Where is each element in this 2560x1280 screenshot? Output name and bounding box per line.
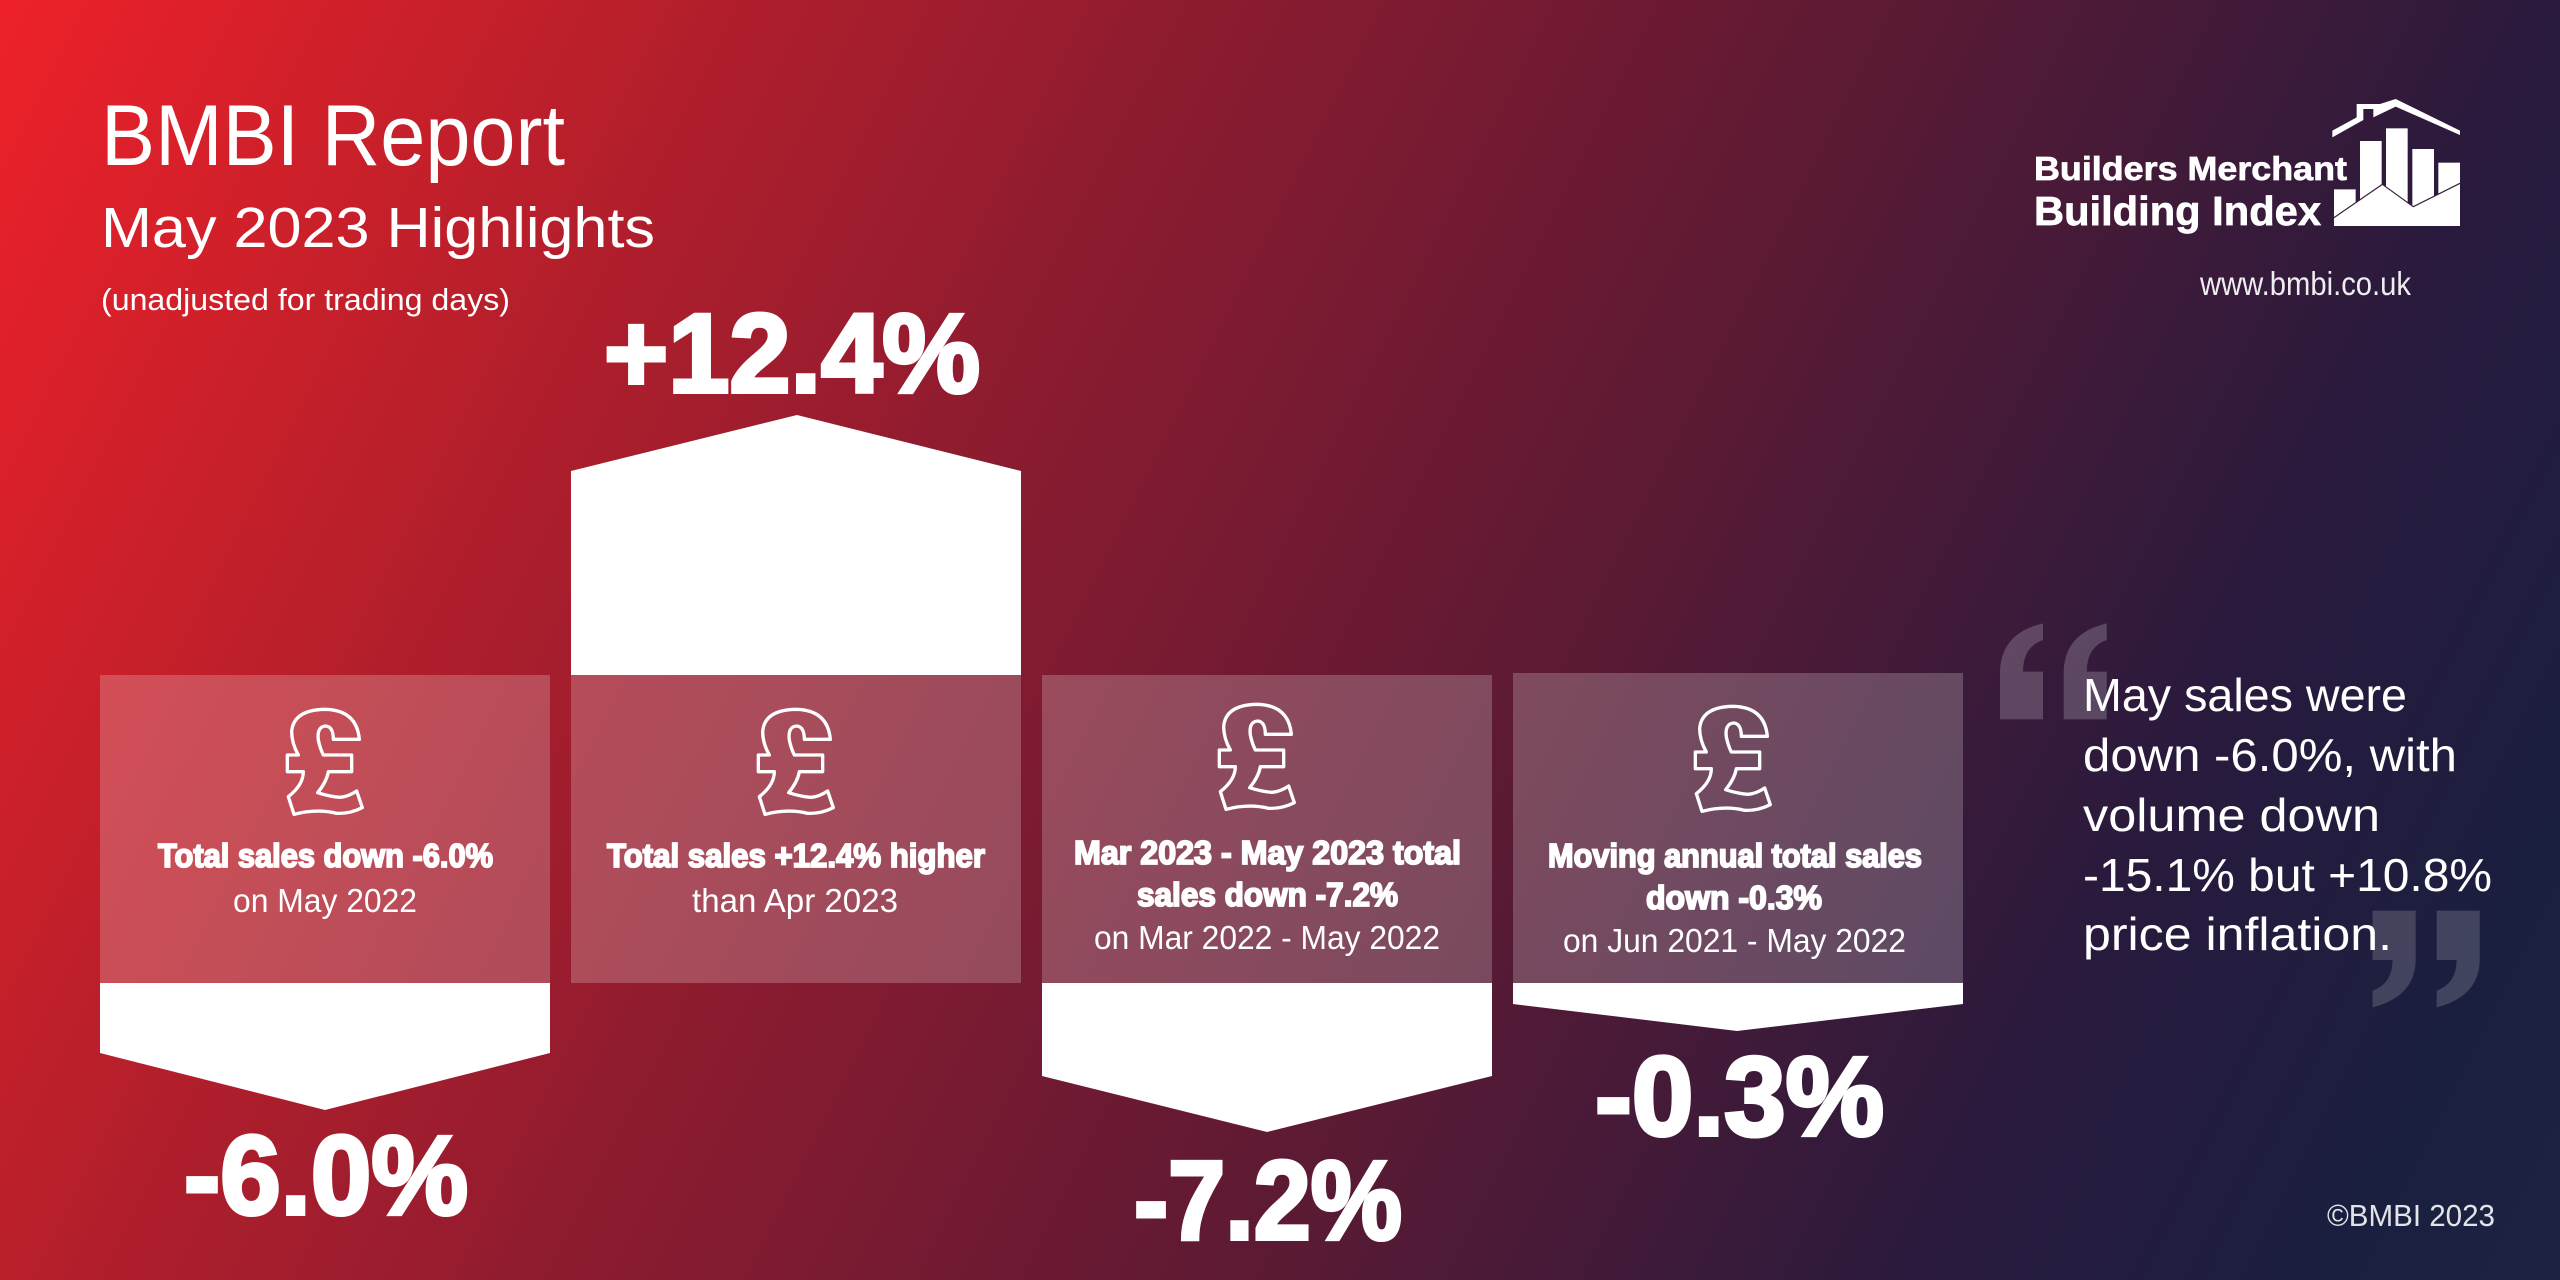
icon: pound	[1219, 704, 1294, 809]
up arrow	[571, 415, 1021, 675]
panel subtext: on May 2022	[233, 882, 417, 919]
panel heading second line: down -0.3%	[1646, 879, 1822, 916]
website: www.bmbi.co.uk	[2199, 265, 2411, 302]
value: -7.2%	[1134, 1138, 1402, 1263]
panel subtext: than Apr 2023	[692, 882, 898, 919]
panel subtext: on Jun 2021 - May 2022	[1563, 922, 1906, 959]
panel: moving annual total sales	[1513, 673, 1963, 1159]
panel background	[1042, 675, 1492, 983]
quote text: -15.1% but +10.8%	[2083, 849, 2492, 901]
panel heading: Moving annual total sales	[1548, 837, 1922, 874]
panel heading: Total sales +12.4% higher	[607, 837, 985, 874]
value: -6.0%	[184, 1113, 468, 1238]
quote text	[2083, 669, 2492, 960]
note: (unadjusted for trading days)	[101, 282, 510, 317]
icon: pound	[287, 709, 362, 814]
panel background	[1513, 673, 1963, 983]
down arrow	[1513, 983, 1963, 1031]
panel: total sales down on May 2022	[100, 675, 550, 1238]
icon: opening quote mark	[2000, 623, 2107, 719]
title: BMBI Report	[101, 88, 565, 184]
title block	[101, 88, 655, 317]
panel: three month total sales	[1042, 675, 1492, 1263]
panel background	[571, 675, 1021, 983]
copyright: ©BMBI 2023	[2327, 1198, 2495, 1233]
subtitle: May 2023 Highlights	[101, 196, 655, 260]
quote	[2000, 623, 2492, 1007]
logo house icon	[2332, 99, 2460, 226]
icon: closing quote mark	[2373, 911, 2480, 1007]
panel heading: Mar 2023 - May 2023 total	[1074, 834, 1461, 871]
quote text: down -6.0%, with	[2083, 729, 2457, 781]
down arrow	[1042, 983, 1492, 1132]
panel: total sales higher than Apr 2023	[571, 291, 1021, 983]
panel background	[100, 675, 550, 983]
quote text: May sales were	[2083, 669, 2407, 721]
icon: pound	[758, 709, 833, 814]
value: -0.3%	[1595, 1034, 1884, 1159]
value: +12.4%	[604, 291, 980, 416]
quote text: volume down	[2083, 789, 2380, 841]
logo wordmark second line: Building Index	[2034, 188, 2321, 234]
panel heading: Total sales down -6.0%	[158, 837, 493, 874]
panel subtext: on Mar 2022 - May 2022	[1094, 919, 1440, 956]
logo wordmark: Builders Merchant	[2034, 150, 2347, 187]
down arrow	[100, 983, 550, 1110]
quote text: price inflation.	[2083, 908, 2392, 960]
icon: pound	[1695, 706, 1770, 811]
panel heading second line: sales down -7.2%	[1137, 876, 1398, 913]
logo: Builders Merchant Building Index	[2034, 99, 2460, 302]
